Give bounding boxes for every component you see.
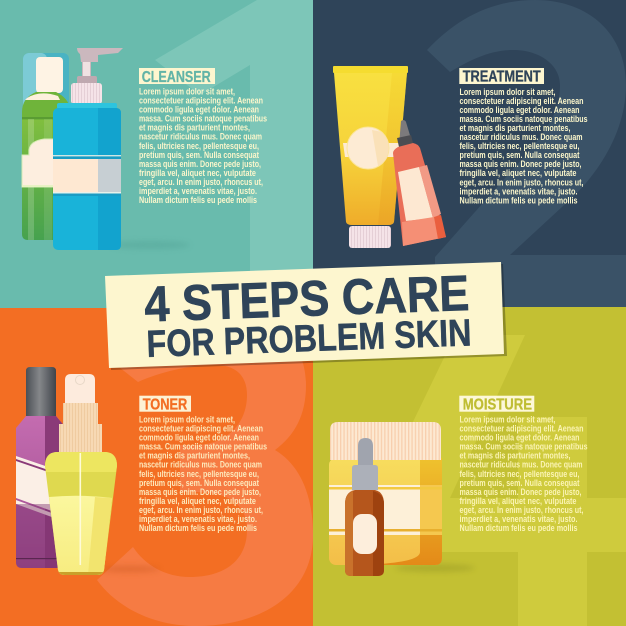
text block: moisture: pretium quis, sem. Nulla consequat [460,478,580,488]
label: moisture: MOISTURE [463,396,532,414]
text block: treatment: consectetuer adipiscing elit. Aenean [460,96,584,106]
big numeral 3 [97,361,313,626]
text block: toner: consectetuer adipiscing elit. Aenean [139,424,263,434]
icon: bottle shadow [100,566,160,572]
text block: moisture: consectetuer adipiscing elit. Aenean [460,424,584,434]
text block: cleanser: consectetuer adipiscing elit. Aenean [139,96,263,106]
text block: toner: fringilla vel, aliquet nec, vulputate [139,496,256,506]
text block: toner: felis, ultricies nec, pellentesque eu, [139,469,259,479]
text block: treatment: massa quis enim. Donec pede justo, [460,159,582,169]
text block: cleanser: pretium quis, sem. Nulla consequat [139,150,259,160]
text block: treatment: et magnis dis parturient montes, [460,123,570,133]
panel: treatment [313,0,626,307]
text block: treatment: commodo ligula eget dolor. Aenean [460,105,580,115]
icon: yellow tube [333,66,408,248]
icon: cream jar [329,422,442,565]
text block: treatment: imperdiet a, venenatis vitae, justo. [460,186,578,196]
panel: moisture [313,307,626,626]
icon: bottle shadow [110,241,190,249]
text block: treatment [460,87,588,205]
text block: toner [139,414,267,533]
text block: toner: nascetur ridiculus mus. Donec quam [139,460,262,470]
text block: treatment: Nullam dictum felis eu pede mollis [460,195,578,205]
text block: moisture: Nullam dictum felis eu pede mollis [460,523,578,533]
panel: toner [0,308,313,626]
icon: red small tube [393,120,446,246]
text block: toner: et magnis dis parturient montes, [139,451,250,461]
text block: moisture: nascetur ridiculus mus. Donec quam [460,460,582,470]
text block: cleanser: Nullam dictum felis eu pede mollis [139,195,257,205]
icon: purple bottle [16,367,66,568]
text block: toner: pretium quis, sem. Nulla consequat [139,478,259,488]
text block: toner: massa. Cum sociis natoque penatibus [139,442,267,452]
text block: cleanser: commodo ligula eget dolor. Aenean [139,105,259,115]
title banner [105,262,507,370]
text block: moisture: imperdiet a, venenatis vitae, justo. [460,514,578,524]
icon: blue pump bottle [53,48,123,250]
big numeral 2 [427,0,626,307]
text block: toner: eget, arcu. In enim justo, rhoncus ut, [139,505,263,515]
icon: green foam bottle [22,53,70,240]
text block: cleanser: fringilla vel, aliquet nec, vulputate [139,168,256,178]
text block: cleanser: nascetur ridiculus mus. Donec quam [139,132,262,142]
text block: treatment: massa. Cum sociis natoque penatibus [460,114,588,124]
text block: moisture: commodo ligula eget dolor. Aenean [460,433,580,443]
text block: moisture: massa. Cum sociis natoque penatibus [460,442,588,452]
text block: cleanser: massa. Cum sociis natoque penatibus [139,114,267,124]
text block: cleanser: et magnis dis parturient montes, [139,123,250,133]
text block: moisture [460,414,588,533]
text block: cleanser: imperdiet a, venenatis vitae, justo. [139,186,257,196]
text block: toner: Lorem ipsum dolor sit amet, [139,414,235,424]
text block: treatment: fringilla vel, aliquet nec, vulputate [460,168,576,178]
text block: treatment: felis, ultricies nec, pellentesque eu, [460,141,580,151]
text block: moisture: eget, arcu. In enim justo, rhoncus ut, [460,505,584,515]
title line 1: 4 STEPS CARE [143,265,470,332]
text block: treatment: nascetur ridiculus mus. Donec quam [460,132,582,142]
text block: treatment: pretium quis, sem. Nulla consequat [460,150,580,160]
label: cleanser: CLEANSER [142,69,211,86]
label: treatment: TREATMENT [463,68,541,85]
big numeral 4 [413,335,626,626]
text block: treatment: Lorem ipsum dolor sit amet, [460,87,556,97]
text block: cleanser: massa quis enim. Donec pede justo, [139,159,261,169]
icon: dropper bottle [345,438,384,576]
text block: toner: massa quis enim. Donec pede justo, [139,487,261,497]
text block: moisture: Lorem ipsum dolor sit amet, [460,414,556,424]
text block: moisture: et magnis dis parturient montes, [460,451,570,461]
text block: cleanser: felis, ultricies nec, pellentesque eu, [139,141,259,151]
text block: toner: commodo ligula eget dolor. Aenean [139,433,259,443]
text block: cleanser: Lorem ipsum dolor sit amet, [139,86,235,96]
text block: treatment: eget, arcu. In enim justo, rhoncus ut, [460,177,584,187]
text block: moisture: fringilla vel, aliquet nec, vulputate [460,496,576,506]
text block: toner: Nullam dictum felis eu pede mollis [139,523,257,533]
icon: yellow spray bottle [45,374,117,575]
title line 2: FOR PROBLEM SKIN [146,312,472,366]
label: toner: TONER [143,396,188,413]
icon: jar shadow [395,564,475,572]
big numeral 1 [156,0,313,271]
text block: cleanser: eget, arcu. In enim justo, rhoncus ut, [139,177,263,187]
text block: moisture: felis, ultricies nec, pellentesque eu, [460,469,580,479]
text block: cleanser [139,86,267,205]
text block: moisture: massa quis enim. Donec pede justo, [460,487,582,497]
text block: toner: imperdiet a, venenatis vitae, justo. [139,514,257,524]
panel: cleanser [0,0,313,308]
